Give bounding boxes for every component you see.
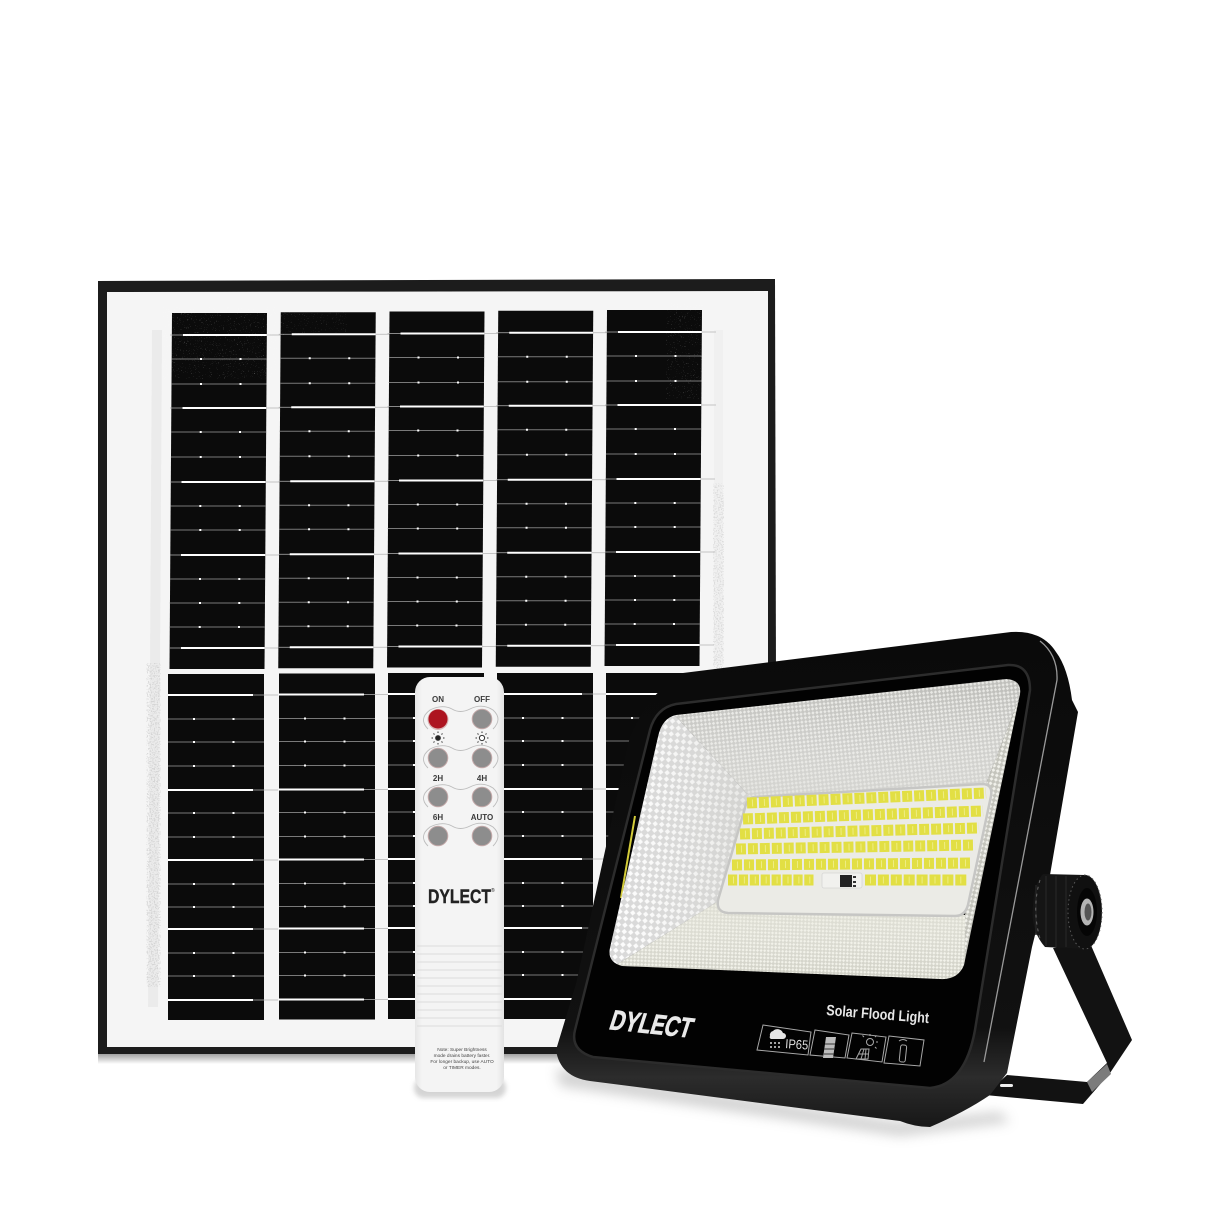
lens [610, 679, 1020, 980]
icon: battery [810, 1030, 849, 1058]
sensor plate [822, 873, 862, 888]
icon: solar sun [847, 1033, 886, 1062]
flood light logo: DYLECT [606, 1004, 698, 1043]
remote note [430, 1047, 494, 1071]
lens right facet [965, 698, 1020, 960]
left contact strip [148, 330, 162, 1007]
panel backing sheet [107, 291, 768, 1047]
yellow edge glint [621, 816, 635, 898]
housing [556, 632, 1078, 1127]
panel frame [98, 279, 776, 1054]
mounting bracket [985, 943, 1132, 1104]
lens bottom facet [617, 902, 965, 980]
button labels: 2H [433, 774, 443, 783]
icon: brightness up [476, 732, 488, 744]
solar panel [98, 279, 776, 1054]
flood light shadow [556, 1068, 1010, 1136]
right contact strip [714, 330, 723, 665]
lens left facet [610, 715, 750, 964]
registered mark: ® [491, 887, 495, 894]
black front plate [574, 665, 1030, 1088]
button labels [432, 695, 493, 822]
LED board [718, 784, 991, 916]
remote note: mode drains battery faster. [434, 1053, 490, 1059]
button labels: 6H [433, 813, 443, 822]
icon: remote [884, 1036, 924, 1066]
on button [428, 709, 448, 730]
housing side stripe [984, 641, 1057, 1062]
lens top facet [674, 679, 1020, 798]
icon: IP65 rain [757, 1025, 811, 1055]
icon: IP65 rain: IP65 [785, 1036, 809, 1053]
feature icons [757, 1025, 924, 1066]
remote note: Note: Super Brightness [437, 1047, 487, 1053]
product illustration [98, 279, 1132, 1141]
remote ribbed grip [417, 946, 502, 1026]
remote control [414, 677, 506, 1098]
icon: brightness down [432, 732, 444, 744]
adjustment knob [1032, 874, 1102, 949]
remote grey buttons [428, 709, 492, 846]
product name: Solar Flood Light [826, 1002, 930, 1027]
remote shadow [414, 1078, 506, 1098]
button labels: ON [432, 695, 444, 704]
remote note: For longer backup, use AUTO [430, 1059, 494, 1065]
button labels: 4H [477, 774, 487, 783]
LED array [728, 793, 986, 880]
button labels: AUTO [471, 813, 493, 822]
remote note: or TIMER modes. [443, 1065, 481, 1071]
remote logo: DYLECT [428, 887, 491, 908]
button labels: OFF [474, 695, 490, 704]
lower solar cells [168, 673, 716, 1020]
button wave outlines [423, 706, 498, 846]
flood light [556, 632, 1132, 1136]
upper solar cells [170, 310, 716, 669]
panel shadow [98, 1052, 568, 1064]
remote body [415, 677, 504, 1092]
